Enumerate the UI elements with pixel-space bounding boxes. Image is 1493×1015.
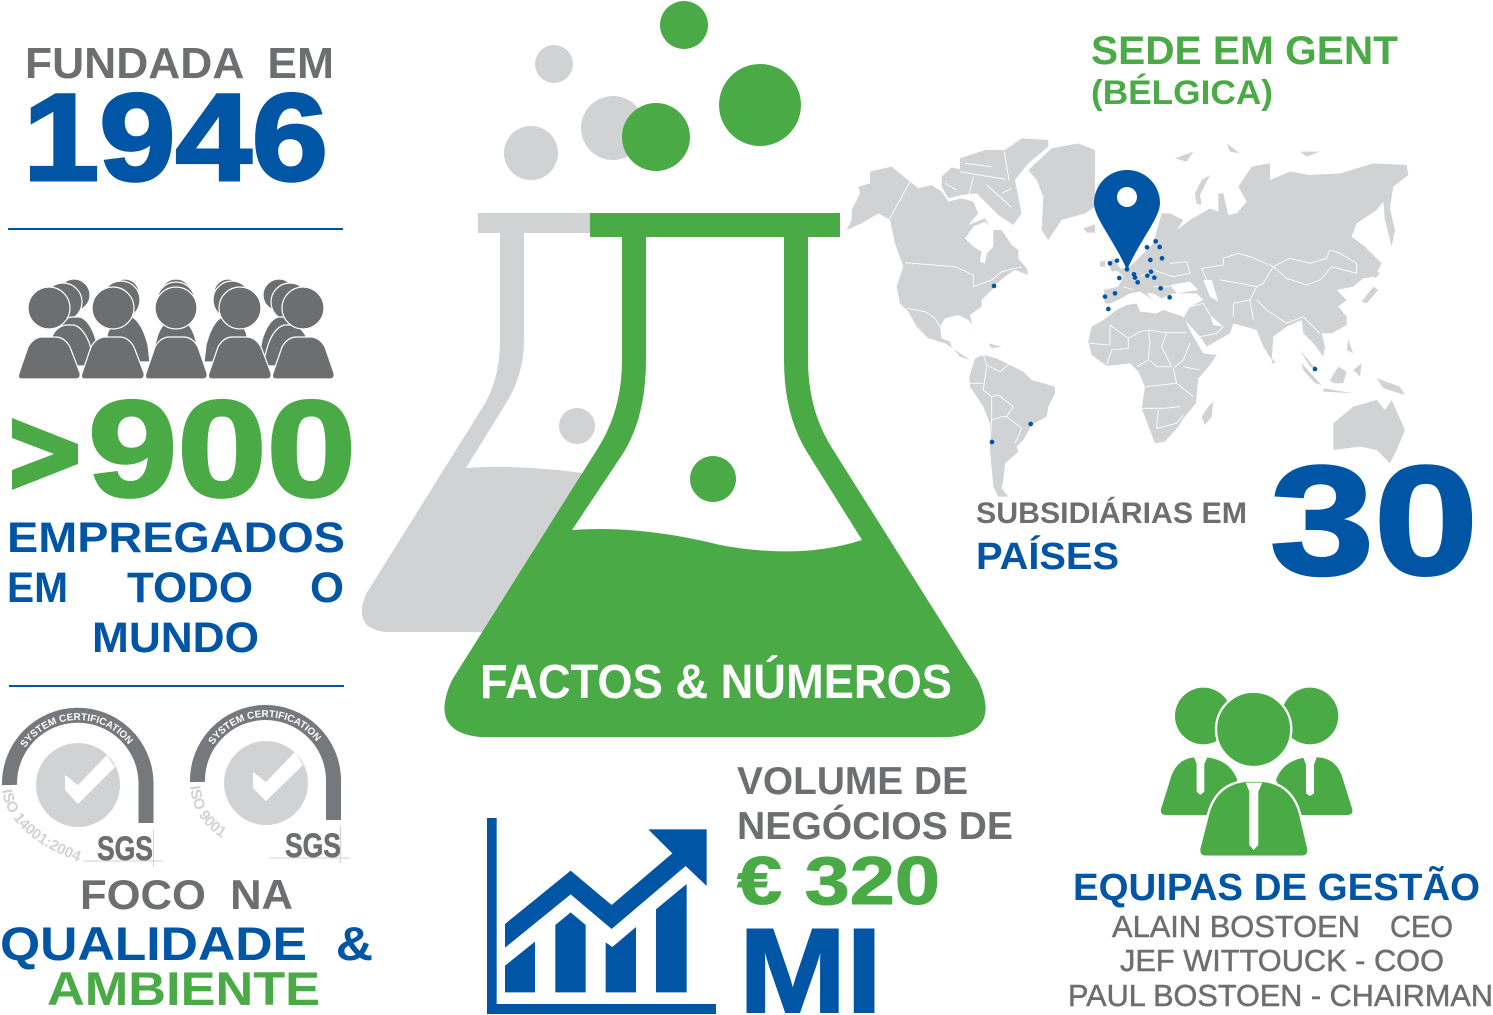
panel: management team names: CEO: [1390, 909, 1453, 944]
map: eurasia and oceania: [1100, 143, 1408, 463]
text: employees worldwide: EMPREGADOS: [7, 514, 345, 562]
heading: headquarters: (BÉLGICA): [1091, 74, 1273, 112]
panel: turnover: VOLUME DE: [737, 760, 968, 803]
badge: SGS ISO 9001: ISO 9001: [190, 786, 226, 838]
icon: management team: [1161, 688, 1352, 857]
panel: turnover: € 320: [737, 843, 940, 919]
panel: management team names: ALAIN BOSTOEN: [1112, 909, 1360, 944]
icon: crowd of people: [18, 279, 334, 379]
badge: SGS ISO 14001: ISO 14001:2004: [2, 790, 81, 862]
panel: management team names: [1068, 865, 1493, 1013]
text: employees worldwide: EM: [7, 564, 68, 612]
heading: founded: FUNDADA EM: [25, 39, 334, 88]
text: focus on quality and environment: [0, 871, 373, 1015]
number: 1946: 1946: [23, 69, 328, 207]
dot: New York office: [992, 284, 996, 288]
panel: employees: [7, 279, 356, 662]
text: focus on quality and environment: AMBIENTE: [47, 962, 320, 1015]
panel: subsidiaries in 30 countries: [976, 434, 1478, 607]
title: FACTOS & NÚMEROS: [480, 654, 952, 709]
icon: growth chart: [487, 818, 716, 1014]
heading: headquarters: [1091, 29, 1398, 112]
map: north america and greenland: [847, 138, 1095, 360]
text: focus on quality and environment: QUALIDADE &: [0, 917, 373, 970]
badge: SGS ISO 9001: SGS: [285, 827, 341, 865]
panel: management team names: EQUIPAS DE GESTÃO: [1073, 865, 1480, 909]
panel: quality certifications: [0, 705, 373, 1015]
panel: founded 1946: [23, 39, 334, 207]
panel: management team names: PAUL BOSTOEN - CHAIRMAN: [1068, 978, 1493, 1013]
heading: headquarters: SEDE EM GENT: [1091, 29, 1398, 73]
text: employees worldwide: [7, 514, 345, 662]
text: focus on quality and environment: FOCO NA: [80, 871, 293, 918]
badge: SGS ISO 14001: [2, 708, 163, 868]
panel: subsidiaries in 30 countries: SUBSIDIÁRIAS EM: [976, 496, 1247, 530]
map: south america and africa: [969, 303, 1217, 497]
panel: subsidiaries in 30 countries: PAÍSES: [976, 534, 1119, 578]
panel: management team names: JEF WITTOUCK - COO: [1120, 943, 1444, 978]
icon: location pin: [1094, 170, 1160, 270]
badge: SGS ISO 9001: SYSTEM CERTIFICATION: [208, 710, 322, 744]
number: more than 900: [12, 373, 356, 526]
panel: turnover: [737, 760, 1013, 1015]
badge: SGS ISO 9001: [190, 705, 350, 865]
number: more than 900: 900: [88, 373, 356, 526]
text: employees worldwide: MUNDO: [92, 614, 259, 662]
dots: Europe and Asia offices: [1103, 239, 1317, 371]
panel: turnover: NEGÓCIOS DE: [737, 804, 1013, 848]
illustration: green flask: [444, 1, 986, 737]
text: employees worldwide: TODO: [127, 564, 253, 612]
panel: subsidiaries in 30 countries: 30: [1270, 434, 1478, 607]
badge: SGS ISO 14001: SGS: [97, 830, 153, 868]
badge: SGS ISO 14001: SYSTEM CERTIFICATION: [20, 713, 134, 747]
world map: [847, 138, 1408, 497]
dots: South America offices: [990, 422, 1033, 444]
text: employees worldwide: O: [310, 564, 344, 612]
illustration: grey background flask: [362, 45, 645, 632]
